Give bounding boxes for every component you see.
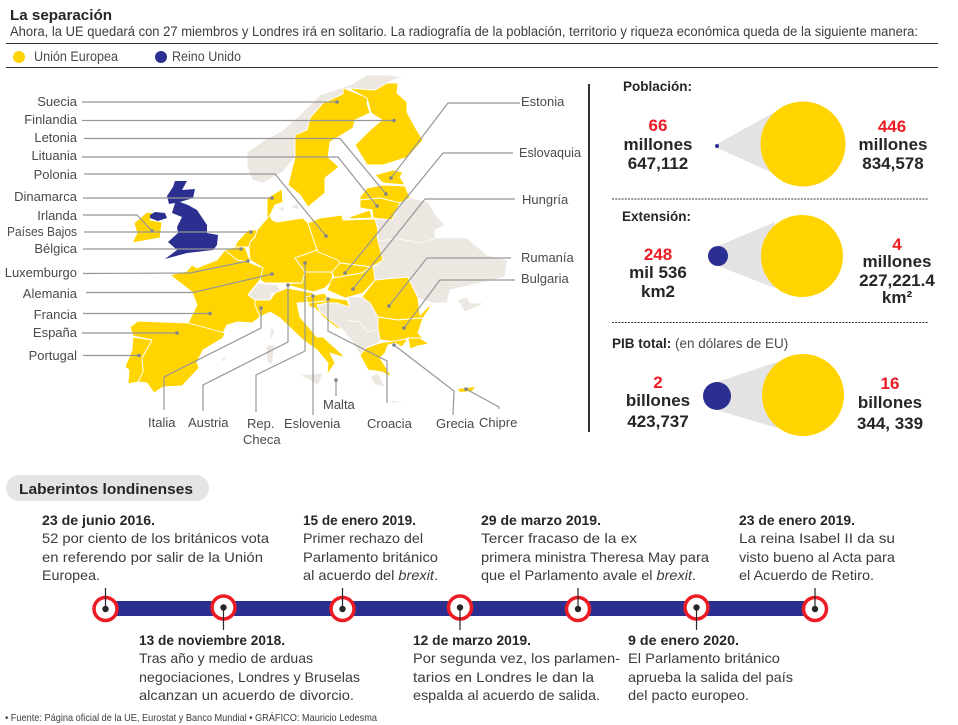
panel: población: millones bbox=[859, 135, 927, 154]
event: 12 de marzo 2019: Por segunda vez, los parlamen- bbox=[413, 650, 620, 666]
panel: PIB total: 344, 339 bbox=[857, 414, 923, 433]
event: 23 de junio 2016: en referendo por salir de la Unión bbox=[42, 549, 263, 565]
heading pill: Laberintos londinenses: Laberintos londinenses bbox=[19, 481, 193, 498]
panel: PIB total: 16 bbox=[881, 374, 899, 393]
panel: PIB total: 423,737 bbox=[627, 412, 689, 431]
country labels: Francia bbox=[34, 307, 78, 322]
event: 23 de enero 2019: La reina Isabel II da su bbox=[739, 530, 895, 546]
panel: extensión: 248 bbox=[644, 245, 672, 264]
EU countries bbox=[125, 83, 475, 393]
country labels right and bottom: Rumanía bbox=[521, 250, 575, 265]
event: 29 de marzo 2019: Tercer fracaso de la ex bbox=[481, 530, 637, 546]
event: 12 de marzo 2019: 12 de marzo 2019. bbox=[413, 632, 531, 648]
event: 9 de enero 2020: aprueba la salida del país bbox=[628, 669, 793, 685]
event: 23 de enero 2019: el Acuerdo de Retiro. bbox=[739, 567, 874, 583]
country labels right and bottom bbox=[148, 94, 582, 447]
country labels right and bottom: Eslovaquia bbox=[519, 145, 582, 160]
country labels: Irlanda bbox=[37, 208, 78, 223]
panel: PIB total: billones bbox=[858, 393, 922, 412]
heading pill: Laberintos londinenses bbox=[6, 475, 209, 501]
event: 9 de enero 2020 bbox=[628, 632, 793, 703]
event: 13 de noviembre 2018: 13 de noviembre 2018. bbox=[139, 632, 285, 648]
legend bbox=[13, 49, 241, 64]
event: 15 de enero 2019: al acuerdo del brexit. bbox=[303, 567, 438, 583]
country labels: Lituania bbox=[31, 148, 78, 163]
panel: población: 66 bbox=[649, 116, 667, 135]
subtitle: Ahora, la UE quedará con 27 miembros y Londres irá en solitario. La radiografía de la población, territorio y riqueza económica queda de la siguiente manera: bbox=[10, 24, 918, 39]
event: 9 de enero 2020: del pacto europeo. bbox=[628, 687, 749, 703]
panel: extensión: km2 bbox=[641, 282, 675, 301]
panel: PIB total: PIB total: (en dólares de EU) bbox=[612, 336, 788, 351]
event: 23 de enero 2019: 23 de enero 2019. bbox=[739, 512, 855, 528]
event: 12 de marzo 2019: tarios en Londres le dan la bbox=[413, 669, 594, 685]
country labels: España bbox=[33, 325, 78, 340]
country labels right and bottom: Eslovenia bbox=[284, 416, 341, 431]
country labels: Portugal bbox=[29, 348, 77, 363]
event: 15 de enero 2019: 15 de enero 2019. bbox=[303, 512, 416, 528]
country labels right and bottom: Grecia bbox=[436, 416, 475, 431]
country labels: Países Bajos bbox=[7, 224, 77, 239]
panel: PIB total: billones bbox=[626, 391, 690, 410]
panel: extensión bbox=[622, 209, 935, 307]
panel: extensión: Extensión: bbox=[622, 209, 691, 224]
title: La separación bbox=[10, 7, 112, 24]
timeline bbox=[94, 588, 826, 630]
country labels right and bottom: Checa bbox=[243, 432, 281, 447]
panel: población: Población: bbox=[623, 79, 692, 94]
country labels right and bottom: Estonia bbox=[521, 94, 565, 109]
country labels: Dinamarca bbox=[14, 189, 78, 204]
country labels: Finlandia bbox=[24, 112, 78, 127]
country labels right and bottom: Hungría bbox=[522, 192, 569, 207]
country labels right and bottom: Malta bbox=[323, 397, 356, 412]
event: 12 de marzo 2019 bbox=[413, 632, 620, 703]
event: 13 de noviembre 2018: negociaciones, Londres y Bruselas bbox=[139, 669, 360, 685]
country labels right and bottom: Bulgaria bbox=[521, 271, 569, 286]
panel: población bbox=[623, 79, 927, 186]
event: 9 de enero 2020: El Parlamento británico bbox=[628, 650, 780, 666]
map of Europe bbox=[125, 75, 507, 403]
event: 15 de enero 2019: Parlamento británico bbox=[303, 549, 438, 565]
footer source: • Fuente: Página oficial de la UE, Eurostat y Banco Mundial • GRÁFICO: Mauricio Ledesma bbox=[5, 711, 377, 724]
event: 13 de noviembre 2018 bbox=[139, 632, 360, 703]
event: 23 de enero 2019 bbox=[739, 512, 895, 583]
event: 23 de junio 2016: Europea. bbox=[42, 567, 100, 583]
panel: población: millones bbox=[624, 135, 692, 154]
panel: extensión: mil 536 bbox=[629, 263, 687, 282]
country labels: Luxemburgo bbox=[5, 265, 77, 280]
country labels right and bottom: Croacia bbox=[367, 416, 413, 431]
panel: población: 647,112 bbox=[628, 154, 688, 173]
legend: Unión Europea bbox=[34, 49, 118, 64]
country labels bbox=[5, 94, 78, 363]
legend: Reino Unido bbox=[172, 49, 241, 64]
event: 23 de junio 2016 bbox=[42, 512, 269, 583]
country labels right and bottom: Italia bbox=[148, 415, 176, 430]
event: 29 de marzo 2019: 29 de marzo 2019. bbox=[481, 512, 601, 528]
panel: PIB total: 2 bbox=[653, 373, 663, 392]
country labels right and bottom: Chipre bbox=[479, 415, 517, 430]
leader lines bbox=[82, 100, 520, 415]
event: 13 de noviembre 2018: Tras año y medio de arduas bbox=[139, 650, 313, 666]
panel: extensión: 227,221.4 bbox=[859, 271, 935, 290]
event: 29 de marzo 2019: que el Parlamento avale el brexit. bbox=[481, 567, 696, 583]
United Kingdom bbox=[150, 181, 218, 259]
event: 29 de marzo 2019 bbox=[481, 512, 709, 583]
panel: extensión: km² bbox=[882, 288, 912, 307]
event: 23 de junio 2016: 23 de junio 2016. bbox=[42, 512, 155, 528]
event: 9 de enero 2020: 9 de enero 2020. bbox=[628, 632, 739, 648]
country labels right and bottom: Rep. bbox=[247, 416, 274, 431]
event: 15 de enero 2019 bbox=[303, 512, 438, 583]
event: 23 de junio 2016: 52 por ciento de los británicos vota bbox=[42, 530, 269, 546]
country labels: Letonia bbox=[34, 130, 78, 145]
country labels: Alemania bbox=[23, 286, 78, 301]
country labels right and bottom: Austria bbox=[188, 415, 229, 430]
panel: población: 834,578 bbox=[862, 154, 924, 173]
country labels: Suecia bbox=[37, 94, 78, 109]
panel: población: 446 bbox=[878, 117, 906, 136]
non-EU land bbox=[220, 75, 507, 403]
country labels: Bélgica bbox=[34, 241, 78, 256]
panel: extensión: 4 bbox=[892, 235, 902, 254]
event: 15 de enero 2019: Primer rechazo del bbox=[303, 530, 423, 546]
panel: PIB total bbox=[612, 336, 923, 436]
event: 12 de marzo 2019: espalda al acuerdo de salida. bbox=[413, 687, 600, 703]
event: 13 de noviembre 2018: alcanzan un acuerdo de divorcio. bbox=[139, 687, 354, 703]
event: 23 de enero 2019: visto bueno al Acta para bbox=[739, 549, 895, 565]
country labels: Polonia bbox=[34, 167, 78, 182]
panel: extensión: millones bbox=[863, 252, 931, 271]
event: 29 de marzo 2019: primera ministra Theresa May para bbox=[481, 549, 709, 565]
